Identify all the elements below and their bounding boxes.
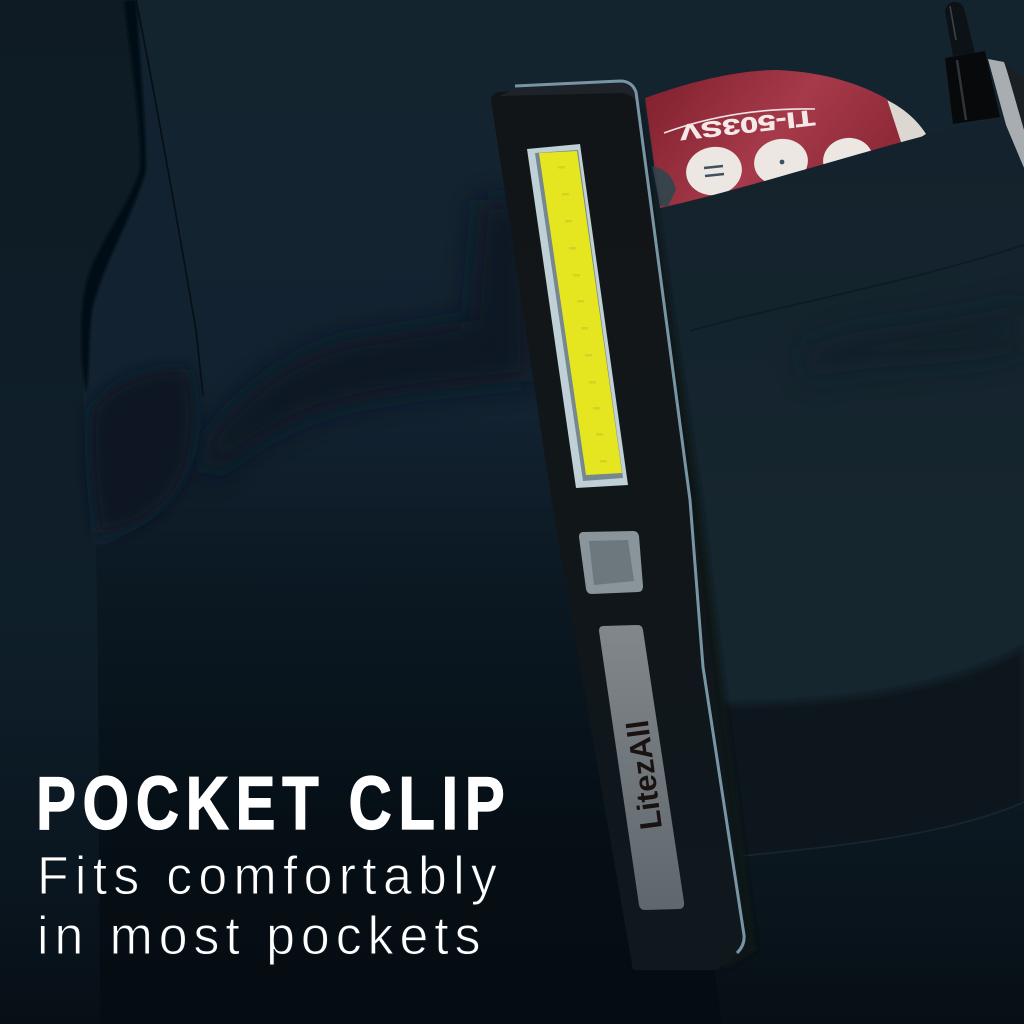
- description line 1: Fits comfortably: [37, 846, 497, 906]
- fold shadow: [90, 369, 194, 533]
- power button centre: [589, 540, 634, 585]
- pen clip: [988, 59, 1024, 168]
- brand name: LitezAll: [620, 718, 669, 832]
- heading: POCKET CLIP: [36, 763, 505, 846]
- seam line: [136, 0, 203, 395]
- pocket hem stitch: [690, 245, 1024, 331]
- brand label plate: [599, 625, 684, 910]
- LED chips: [558, 166, 607, 462]
- dark gap between sleeve and fold: [81, 0, 146, 392]
- equals button: [682, 143, 746, 199]
- LED window frame: [527, 144, 628, 488]
- pocket crease: [800, 300, 1024, 380]
- pocket lower shadow: [700, 647, 1024, 860]
- dark side button: [652, 166, 676, 206]
- pen in pocket: [945, 2, 1024, 168]
- calculator in pocket: [645, 70, 926, 208]
- heading and description: [36, 763, 505, 966]
- LED frame inner line: [535, 150, 623, 481]
- pocket cloth: [655, 118, 1024, 1024]
- pocket bottom stitch: [742, 802, 1024, 856]
- description line 2: in most pockets: [37, 906, 481, 966]
- shadow across the shirt front: [205, 200, 530, 480]
- model underline arc: [664, 109, 815, 133]
- left sleeve panel: [0, 0, 143, 1024]
- power button: [579, 531, 643, 594]
- decimal button: [750, 135, 812, 189]
- flashlight: [491, 80, 756, 970]
- white back shell: [885, 99, 926, 150]
- top bevel: [500, 82, 642, 112]
- placket fold with seam: [81, 0, 203, 545]
- blue edge highlight: [515, 81, 744, 953]
- red case: [645, 70, 902, 208]
- body shadow on pocket: [640, 100, 756, 970]
- model text: TI-503SV: [678, 105, 816, 145]
- flashlight body: [491, 80, 746, 970]
- COB LED panel: [539, 151, 622, 475]
- bottom pocket panel: [700, 800, 1024, 1024]
- third button: [820, 134, 876, 186]
